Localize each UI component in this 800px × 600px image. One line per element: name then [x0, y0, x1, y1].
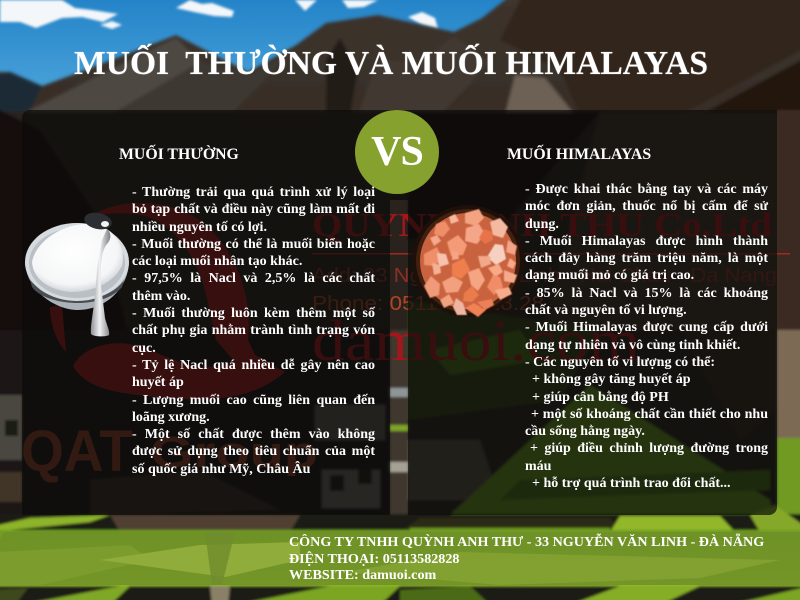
text block: Himalayan salt points [525, 182, 768, 491]
heading: Himalayan salt: MUỐI HIMALAYAS [507, 146, 651, 163]
text block: Himalayan salt points: - Muối Himalayas được cung cấp dưới [525, 320, 768, 335]
text block: Himalayan salt points: + không gây tăng huyết áp [532, 372, 691, 387]
footer contact text: CÔNG TY TNHH QUỲNH ANH THƯ - 33 NGUYỄN VĂN LINH - ĐÀ NẴNG [289, 534, 764, 550]
watermark company text [21, 207, 790, 484]
watermark company text: Phone: 0511.358.28.28 [312, 293, 544, 315]
text block: regular salt points: - Thường trải qua quá trình xử lý loại [132, 185, 375, 200]
text block: Himalayan salt points: - 85% là Nacl và 15% là các khoáng [525, 286, 768, 301]
text block: regular salt points: thêm vào. [132, 289, 190, 304]
text block: Himalayan salt points: - Muối Himalayas được hình thành [525, 234, 768, 249]
text block: Himalayan salt points: + một số khoáng chất cần thiết cho nhu [531, 407, 768, 422]
footer contact text: WEBSITE: damuoi.com [289, 567, 436, 583]
VS badge [355, 110, 439, 194]
title: MUỐI THƯỜNG VÀ MUỐI HIMALAYAS [74, 45, 708, 82]
text block: regular salt points: số quốc giá như Mỹ, Châu Âu [132, 462, 310, 477]
watermark logo swirl [50, 203, 285, 399]
text block: Himalayan salt points: chất và nguyên tố vi lượng. [525, 303, 687, 318]
text block: Himalayan salt points: + giúp cân bằng độ PH [532, 390, 669, 405]
text block: Himalayan salt points: - Các nguyên tố vi lượng có thể: [525, 355, 715, 370]
footer contact text [289, 534, 764, 583]
icon: white salt bowl [25, 212, 129, 336]
text block: regular salt points: được sử dụng theo tiêu chuẩn của một [132, 444, 375, 459]
text block: regular salt points: huyết áp [132, 375, 184, 390]
text block: Himalayan salt points: dụng. [525, 217, 559, 232]
text block: Himalayan salt points: - Được khai thác bằng tay và các máy [525, 182, 768, 197]
text block: regular salt points: loãng xương. [132, 410, 210, 425]
text block: regular salt points: bỏ tạp chất và điều này cũng làm mất đi [132, 202, 375, 217]
text block: regular salt points: cục. [132, 341, 156, 356]
watermark company text: Add: 33 Nguyen Van Linh - Hai Chau - Da Nang [312, 265, 777, 287]
VS badge: VS [371, 129, 423, 175]
text block: Himalayan salt points: cầu sống hằng ngày. [525, 424, 645, 439]
text block: regular salt points: chất phụ gia nhằm trành tình trạng vón [132, 323, 375, 338]
watermark company text: damuoi.com [312, 308, 640, 373]
text block: Himalayan salt points: + hỗ trợ quá trình trao đổi chất... [532, 476, 731, 491]
text block: regular salt points: - 97,5% là Nacl và 2,5% là các chất [132, 271, 375, 286]
text block: Himalayan salt points: + giúp điều chỉnh lượng đường trong [530, 441, 768, 456]
text block: regular salt points: - Muối thường luôn kèm thêm một số [132, 306, 375, 321]
text block: Himalayan salt points: cách đây hàng trăm triệu năm, là một [525, 251, 768, 266]
text block: Himalayan salt points: dạng muối mỏ có giá trị cao. [525, 268, 694, 283]
watermark company text: QAT [21, 419, 133, 484]
heading: regular salt: MUỐI THƯỜNG [119, 146, 239, 163]
text block: regular salt points: - Lượng muối cao cũng liên quan đến [132, 393, 375, 408]
text block: regular salt points: các loại muối nhân tạo khác. [132, 254, 302, 269]
text block: Himalayan salt points: móc đơn giản, thuốc nổ bị cấm để sử [525, 199, 768, 214]
text block: regular salt points: nhiều nguyên tố có lợi. [132, 220, 267, 235]
text block: regular salt points: - Muối thường có thể là muối biển hoặc [132, 237, 375, 252]
text block: Himalayan salt points: máu [525, 459, 551, 474]
footer contact text: ĐIỆN THOẠI: 05113582828 [289, 551, 459, 567]
text block: regular salt points [132, 185, 376, 477]
text block: regular salt points: - Tỷ lệ Nacl quá nhiều dễ gây nên cao [132, 358, 375, 373]
icon: pink Himalayan salt bowl [412, 205, 524, 318]
watermark company text: QUYNH ANH THU Co.Ltd [312, 207, 772, 244]
text block: Himalayan salt points: dạng tự nhiên và vô cùng tinh khiết. [525, 338, 740, 353]
watermark company text: Group [150, 428, 318, 477]
text block: regular salt points: - Một số chất được thêm vào không [132, 427, 375, 442]
